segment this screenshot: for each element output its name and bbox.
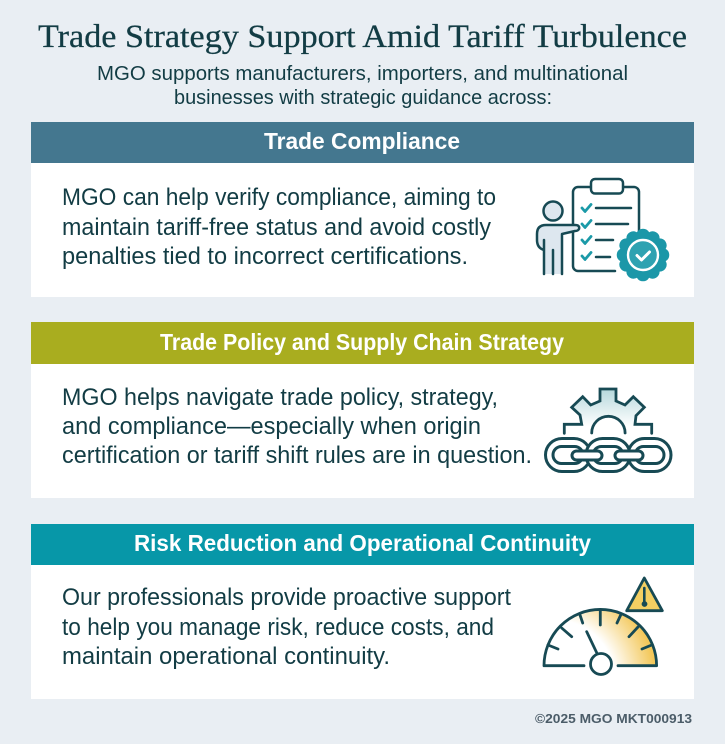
panel: trade policy xyxy=(31,322,694,498)
icon: gear and chain xyxy=(546,389,671,472)
panel: risk reduction xyxy=(31,524,694,699)
text block: trade policy: MGO helps navigate trade policy, strategy, xyxy=(62,384,498,411)
heading: trade policy xyxy=(31,322,694,364)
icon: gauge with warning xyxy=(544,578,662,674)
heading: trade compliance xyxy=(31,122,694,163)
text block: risk reduction: Our professionals provide proactive support xyxy=(62,584,511,611)
text block: trade policy: certification or tariff shift rules are in question. xyxy=(62,442,532,469)
subtitle: MGO supports manufacturers, importers, and multinational xyxy=(97,63,628,85)
text block: risk reduction xyxy=(62,584,511,670)
text block: trade policy xyxy=(62,384,532,469)
heading: trade compliance: Trade Compliance xyxy=(264,128,460,154)
text block: trade compliance: penalties tied to incorrect certifications. xyxy=(62,243,468,270)
title: Trade Strategy Support Amid Tariff Turbulence xyxy=(38,19,687,55)
text block: trade compliance: maintain tariff-free status and avoid costly xyxy=(62,214,491,241)
text block: trade compliance xyxy=(62,184,496,270)
text block: risk reduction: maintain operational continuity. xyxy=(62,643,390,670)
text block: trade compliance: MGO can help verify compliance, aiming to xyxy=(62,184,496,211)
heading: risk reduction: Risk Reduction and Operational Continuity xyxy=(134,530,591,556)
text block: risk reduction: to help you manage risk, reduce costs, and xyxy=(62,614,494,641)
text block: trade policy: and compliance—especially when origin xyxy=(62,413,481,440)
copyright: ©2025 MGO MKT000913 xyxy=(535,712,692,726)
heading: risk reduction xyxy=(31,524,694,565)
subtitle: businesses with strategic guidance across: xyxy=(174,87,552,109)
icon: checklist with person and badge xyxy=(537,179,669,281)
subtitle xyxy=(97,63,628,109)
panel: trade compliance xyxy=(31,122,694,297)
heading: trade policy: Trade Policy and Supply Chain Strategy xyxy=(160,329,564,355)
